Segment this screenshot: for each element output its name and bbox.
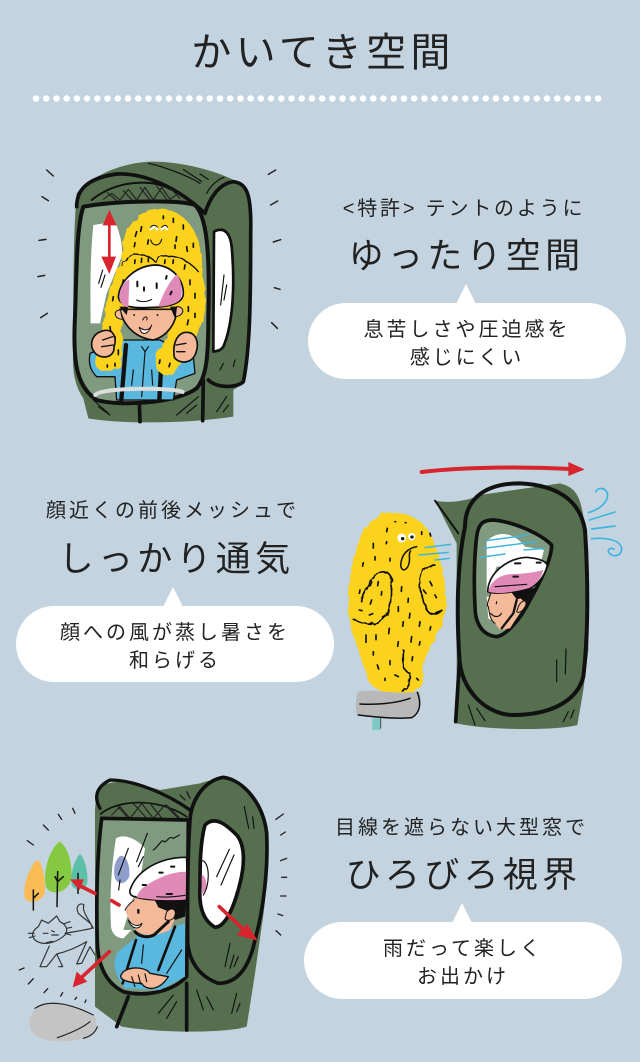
caption: 顔近くの前後メッシュで [46, 500, 299, 522]
helmet [118, 265, 183, 308]
lower seams [117, 983, 187, 1030]
face [125, 897, 185, 935]
cat [28, 904, 95, 967]
red arrow [422, 468, 572, 472]
left window [90, 222, 122, 323]
caption: <特許> テントのように [343, 198, 585, 220]
face [120, 309, 177, 340]
jacket [89, 340, 195, 400]
text block: wide view [304, 817, 622, 999]
right window [213, 230, 233, 352]
side window [110, 836, 145, 938]
rock [29, 1003, 97, 1042]
speech bubble: 息苦しさや圧迫感を [364, 319, 570, 341]
cover back [95, 780, 266, 1032]
cover body [73, 162, 251, 422]
red arrow [105, 222, 113, 262]
face [487, 588, 535, 630]
front panel [188, 777, 267, 983]
seat [372, 718, 380, 730]
hood outline [77, 174, 205, 213]
dotted divider [32, 95, 602, 102]
illustration: ventilation side view [348, 462, 622, 730]
heading: ひろびろ視界 [346, 856, 581, 895]
upper cushion [123, 210, 202, 277]
speech bubble: 和らげる [129, 650, 221, 672]
speech bubble [304, 922, 622, 999]
helmet [130, 857, 187, 900]
trees [24, 860, 45, 902]
hair [97, 252, 204, 373]
wind from cushion [419, 544, 451, 560]
title: かいてき空間 [191, 31, 455, 75]
side panel outline [205, 182, 251, 386]
front window [200, 821, 243, 927]
wind exit [588, 489, 622, 556]
speech bubble [308, 303, 626, 379]
inner window [97, 818, 188, 994]
window [474, 520, 552, 637]
speech bubble: 感じにくい [410, 347, 524, 369]
hood [97, 780, 190, 810]
text block: spacious [308, 198, 626, 379]
speech bubble [16, 606, 334, 682]
cover [435, 483, 588, 729]
illustration: wide view through large windows [18, 776, 288, 1042]
speech bubble: 雨だって楽しく [383, 938, 543, 960]
red arrows [78, 885, 243, 977]
heading: しっかり通気 [59, 540, 294, 579]
bottom seams [139, 380, 203, 422]
cushion eyes [397, 534, 406, 542]
inner window [74, 201, 209, 403]
speech bubble: 顔への風が蒸し暑さを [60, 622, 290, 644]
ticks [19, 808, 287, 1002]
ticks [38, 170, 281, 328]
mesh [112, 803, 182, 820]
wind through window [480, 535, 544, 557]
cushion [349, 514, 445, 694]
mesh [103, 186, 180, 201]
arms [121, 968, 168, 988]
helmet [488, 557, 547, 593]
speech bubble: お出かけ [417, 966, 509, 988]
heading: ゆったり空間 [349, 237, 584, 276]
hands [92, 330, 197, 362]
body [114, 923, 185, 990]
illustration: spacious cover with child [37, 162, 282, 424]
text block: ventilation [16, 500, 334, 682]
handlebar [95, 389, 183, 395]
caption: 目線を遮らない大型窓で [335, 817, 588, 839]
